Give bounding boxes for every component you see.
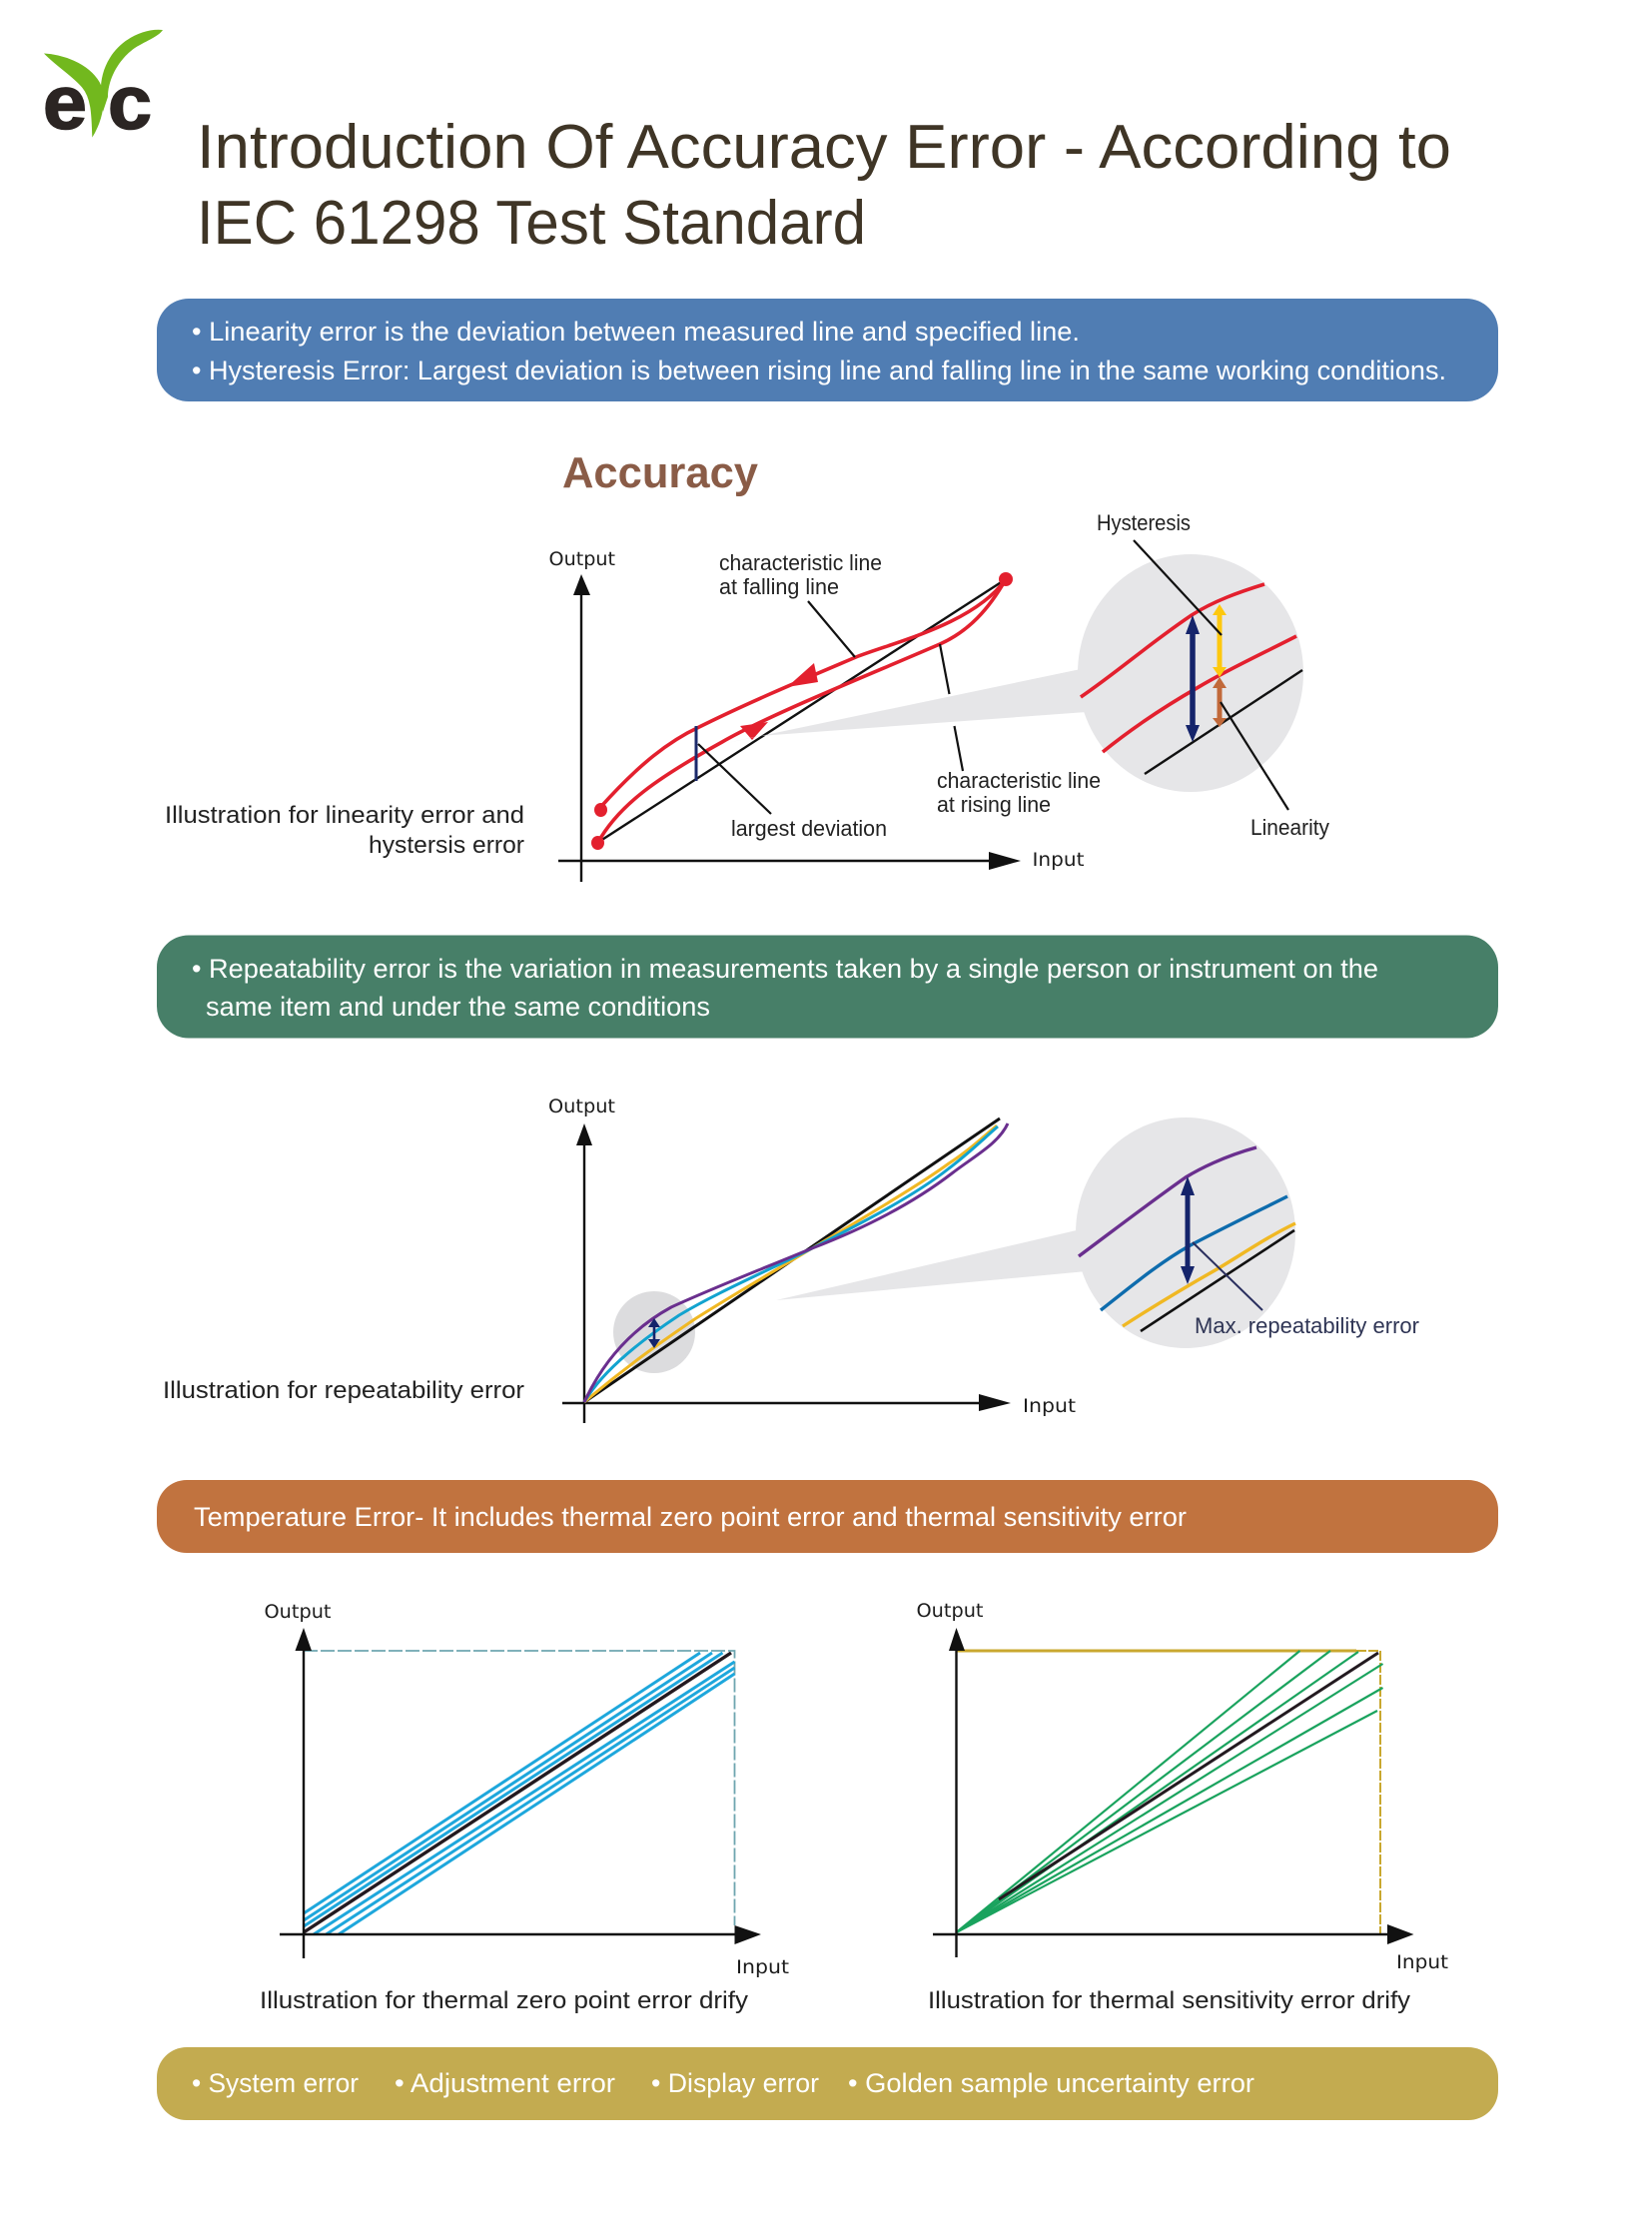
repeatability leader bbox=[1193, 1242, 1262, 1310]
error list: • System error bbox=[192, 2068, 359, 2098]
caption: repeatability: Illustration for repeatability error bbox=[163, 1377, 524, 1404]
chart: repeatability bbox=[548, 1096, 1419, 1423]
axes bbox=[280, 1628, 761, 1958]
axis label: Output: Output bbox=[549, 548, 615, 570]
axes bbox=[558, 574, 1021, 882]
reference line bbox=[584, 1118, 1000, 1402]
axis label: Output: Output bbox=[548, 1096, 615, 1117]
logo letter c: c bbox=[108, 61, 152, 146]
definition text: same item and under the same conditions bbox=[206, 992, 710, 1022]
axis label: Output: Output bbox=[264, 1601, 332, 1623]
specified line bbox=[597, 579, 1006, 843]
error list: • Adjustment error bbox=[395, 2068, 615, 2098]
error list: • Display error bbox=[651, 2068, 819, 2098]
cyan curve bbox=[584, 1126, 998, 1402]
label: hysteresis: Hysteresis bbox=[1097, 510, 1191, 535]
caption: thermal zero point: Illustration for thermal zero point error drify bbox=[260, 1987, 748, 2014]
error list: • Golden sample uncertainty error bbox=[848, 2068, 1254, 2098]
caption: linearity and hysteresis: hystersis error bbox=[369, 832, 524, 859]
label: falling line: characteristic line bbox=[719, 550, 882, 575]
leader lines bbox=[698, 601, 963, 814]
yellow curve bbox=[584, 1125, 997, 1402]
zoom circle bbox=[1078, 554, 1303, 792]
label: rising line bbox=[937, 768, 1101, 817]
title bbox=[197, 113, 1451, 258]
label: falling line: at falling line bbox=[719, 574, 839, 599]
axis label: Input: Input bbox=[736, 1956, 789, 1978]
logo right leaf bbox=[101, 30, 163, 112]
definition text: Temperature Error- It includes thermal zero point error and thermal sensitivity error bbox=[194, 1502, 1187, 1532]
zoom circle bbox=[1076, 1117, 1295, 1348]
falling arrow bbox=[787, 663, 818, 687]
definition text bbox=[192, 317, 1446, 385]
title: Introduction Of Accuracy Error - According to bbox=[197, 113, 1451, 182]
zoom wedge bbox=[722, 669, 1087, 744]
caption: thermal sensitivity: Illustration for thermal sensitivity error drify bbox=[928, 1987, 1410, 2014]
hysteresis leader bbox=[1134, 540, 1222, 635]
linearity arrow bbox=[1213, 677, 1227, 727]
label: falling line bbox=[719, 550, 882, 599]
heading: Accuracy: Accuracy bbox=[562, 448, 759, 497]
purple curve bbox=[584, 1123, 1008, 1402]
label: linearity: Linearity bbox=[1250, 815, 1329, 840]
largest deviation marker bbox=[695, 726, 697, 781]
largest deviation arrow bbox=[1186, 615, 1200, 742]
frame dashed guides bbox=[304, 1651, 735, 1925]
label: max repeatability error: Max. repeatability error bbox=[1195, 1313, 1419, 1338]
drift lines bbox=[304, 1653, 735, 1934]
panel: other errors bbox=[157, 2047, 1498, 2120]
drift lines bbox=[957, 1651, 1382, 1932]
zoomed curves bbox=[1079, 1147, 1295, 1326]
small highlight circle bbox=[613, 1291, 695, 1373]
definition text: • Linearity error is the deviation between measured line and specified line. bbox=[192, 317, 1080, 347]
definition text: • Repeatability error is the variation in measurements taken by a single person or instrument on the bbox=[192, 954, 1378, 984]
reference line bbox=[304, 1653, 731, 1932]
chart: thermal sensitivity error bbox=[917, 1600, 1448, 1973]
zoomed reference line bbox=[1141, 1230, 1294, 1331]
reference line bbox=[999, 1653, 1378, 1899]
label: rising line: characteristic line bbox=[937, 768, 1101, 793]
axis label: Input: Input bbox=[1033, 849, 1085, 871]
linearity leader bbox=[1221, 702, 1288, 810]
rising arrow bbox=[740, 722, 768, 740]
panel: temperature error bbox=[157, 1480, 1498, 1553]
zoom wedge bbox=[776, 1229, 1087, 1300]
logo bbox=[43, 30, 163, 146]
label: largest deviation: largest deviation bbox=[731, 816, 887, 841]
max repeatability arrow bbox=[1181, 1176, 1195, 1284]
axis label: Input: Input bbox=[1396, 1951, 1448, 1973]
frame guides bbox=[956, 1651, 1380, 1934]
error list bbox=[192, 2068, 1254, 2098]
axis label: Output: Output bbox=[917, 1600, 983, 1622]
label: rising line: at rising line bbox=[937, 792, 1051, 817]
panel: repeatability definition bbox=[157, 935, 1498, 1039]
axes bbox=[933, 1628, 1414, 1957]
axis label: Input: Input bbox=[1023, 1395, 1076, 1417]
logo left leaf bbox=[43, 53, 104, 139]
caption: linearity and hysteresis: Illustration for linearity error and bbox=[165, 802, 524, 829]
title: IEC 61298 Test Standard bbox=[197, 189, 866, 258]
chart: accuracy hysteresis and linearity bbox=[549, 510, 1329, 882]
zoomed red lines bbox=[1081, 584, 1296, 752]
logo letter e: e bbox=[43, 61, 87, 146]
definition text: • Hysteresis Error: Largest deviation is between rising line and falling line in the same working conditions. bbox=[192, 356, 1446, 385]
rising characteristic line bbox=[597, 579, 1006, 843]
end points bbox=[591, 572, 1013, 850]
small error arrow bbox=[648, 1318, 660, 1348]
definition text bbox=[192, 954, 1378, 1022]
caption: linearity and hysteresis bbox=[165, 802, 524, 859]
panel: linearity and hysteresis definitions bbox=[157, 299, 1498, 401]
axes bbox=[562, 1123, 1011, 1423]
zoomed specified line bbox=[1145, 670, 1302, 774]
hysteresis arrow bbox=[1213, 604, 1227, 677]
chart: thermal zero point error bbox=[264, 1601, 789, 1978]
falling characteristic line bbox=[601, 579, 1006, 807]
